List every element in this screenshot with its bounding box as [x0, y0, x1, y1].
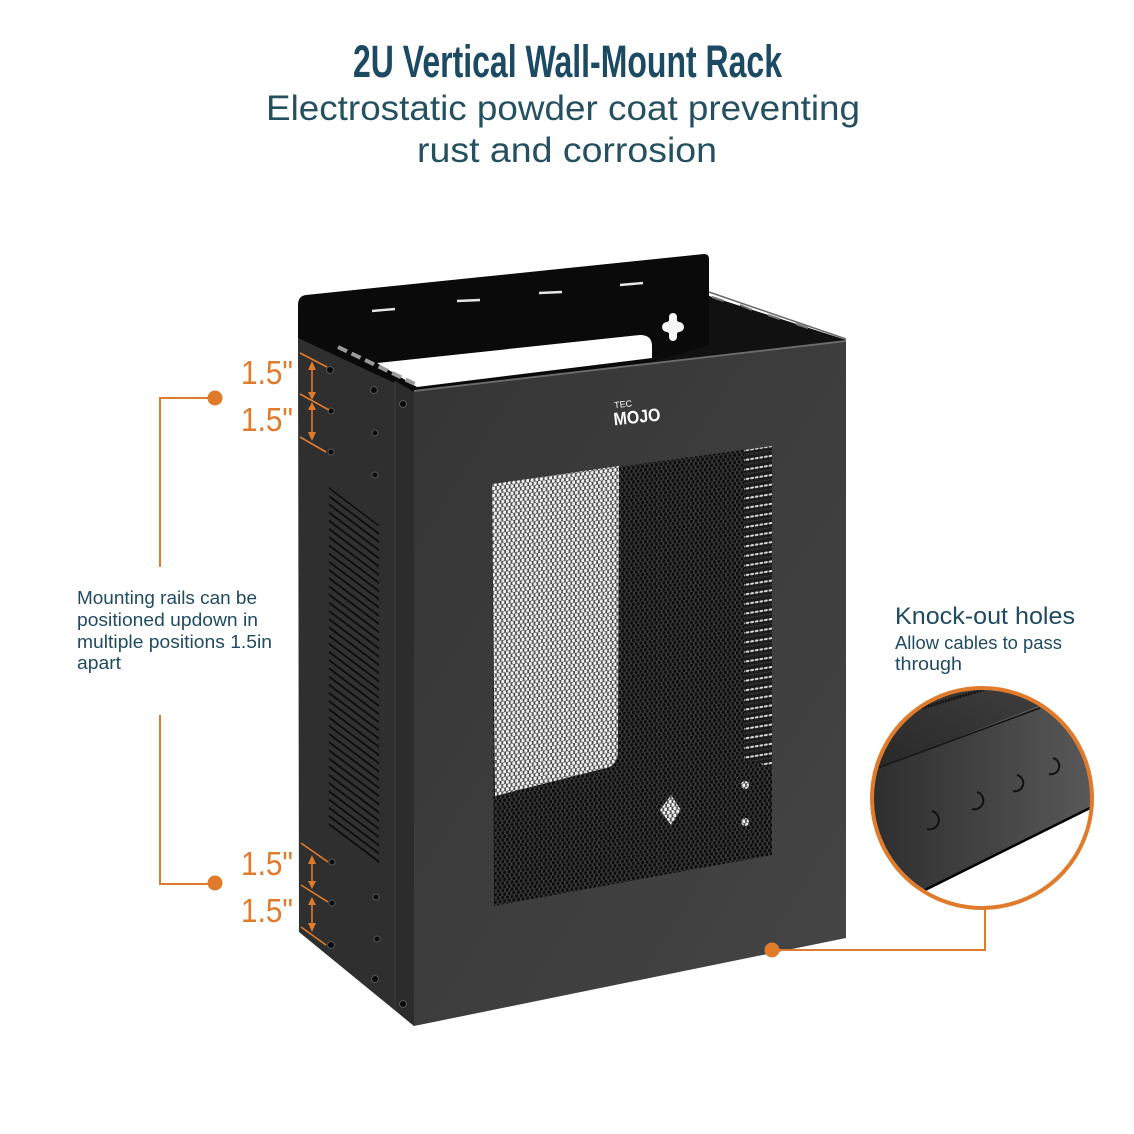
product: wall-mount rack: [298, 254, 846, 1026]
subtitle: rust and corrosion: [417, 131, 717, 170]
dimension markers: top: [241, 353, 329, 452]
brand logo: MOJO: [613, 405, 661, 429]
keyhole cutout: [662, 313, 684, 341]
white opening: [377, 335, 652, 387]
text: knock-out holes: Knock-out holes: [895, 603, 1075, 630]
text: knock-out holes: Allow cables to pass: [895, 633, 1062, 653]
callout bracket: mounting rails: [160, 390, 222, 890]
text: knock-out holes: [895, 603, 1075, 674]
detail circle: knock-out holes: [860, 680, 1100, 910]
text: mounting rails note: [77, 588, 272, 673]
text: knock-out holes: through: [895, 654, 962, 674]
subtitle: [266, 89, 860, 170]
slots: [372, 283, 643, 311]
dimension markers: top: 1.5": [241, 354, 293, 391]
callout connector: [764, 908, 985, 958]
dimension markers: bottom: [241, 843, 328, 945]
brand logo: TEC: [614, 398, 633, 410]
knock-out discs: [927, 758, 1059, 829]
front panel: [414, 341, 846, 1026]
side vents: [329, 487, 379, 863]
perforated window: [492, 446, 772, 906]
brand logo: [612, 396, 661, 429]
dimension markers: bottom: 1.5": [241, 845, 293, 882]
title: 2U Vertical Wall-Mount Rack: [353, 36, 783, 87]
text: mounting rails note: Mounting rails can be: [77, 588, 257, 608]
side panel: [298, 338, 417, 1026]
text: mounting rails note: multiple positions 1.5in: [77, 632, 272, 652]
rear mounting plate: [298, 254, 846, 410]
subtitle: Electrostatic powder coat preventing: [266, 89, 860, 128]
rail holes: [326, 366, 406, 1008]
text: mounting rails note: apart: [77, 653, 121, 673]
text: mounting rails note: positioned updown in: [77, 610, 258, 630]
dimension markers: bottom: 1.5": [241, 892, 293, 929]
dimension markers: top: 1.5": [241, 401, 293, 438]
